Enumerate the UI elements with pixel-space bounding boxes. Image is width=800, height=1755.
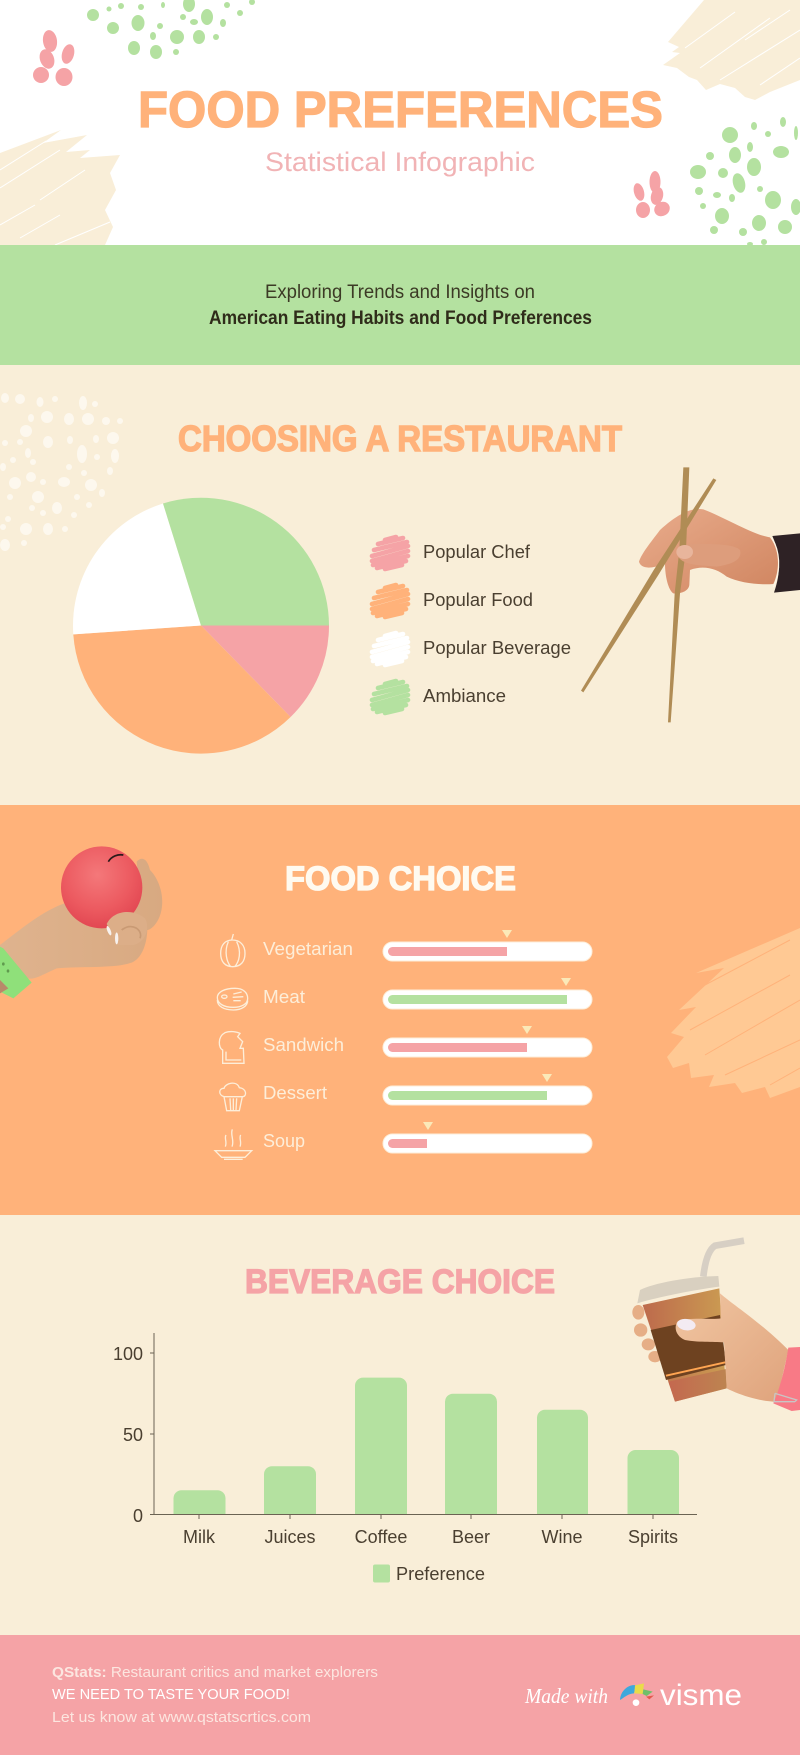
leaf cluster: top left pink — [33, 29, 76, 86]
legend: popular food: Popular Food — [423, 590, 533, 610]
brush stroke: top right — [663, 0, 800, 100]
legend: popular food — [372, 585, 533, 617]
made with visme: visme — [660, 1679, 742, 1712]
brush stroke: left — [0, 130, 120, 245]
icon: muffin — [220, 1083, 246, 1111]
x axis labels: Wine — [541, 1527, 583, 1547]
made with visme: Made with — [524, 1684, 608, 1708]
row: dessert — [263, 1074, 592, 1105]
dots: top green — [87, 0, 255, 59]
y axis labels — [113, 1344, 143, 1526]
footer line 2: WE NEED TO TASTE YOUR FOOD! — [52, 1687, 290, 1703]
y axis labels: 0 — [133, 1506, 143, 1526]
brush stroke: right — [667, 928, 800, 1098]
heading: FOOD CHOICE — [285, 860, 516, 898]
bars — [174, 1378, 679, 1514]
chart legend: Preference — [396, 1564, 485, 1584]
intro bold line: American Eating Habits and Food Preferences — [209, 308, 592, 329]
panel: beverage choice — [0, 1215, 800, 1635]
illustration: hand holding cup — [632, 1241, 800, 1411]
panel: footer — [0, 1635, 800, 1755]
row: sandwich — [263, 1026, 592, 1057]
icon: soup — [215, 1129, 252, 1159]
row: meat — [263, 978, 592, 1009]
x axis labels: Milk — [183, 1527, 216, 1547]
x axis labels: Beer — [452, 1527, 490, 1547]
x axis labels — [183, 1527, 678, 1547]
intro line: Exploring Trends and Insights on — [265, 282, 535, 303]
legend: ambiance: Ambiance — [423, 686, 506, 706]
icon: sandwich — [219, 1032, 244, 1063]
icon: meat — [217, 988, 248, 1010]
subtitle: Statistical Infographic — [265, 147, 535, 177]
row: soup — [263, 1122, 592, 1153]
panel: intro banner — [0, 245, 800, 365]
icon: pepper — [221, 934, 245, 967]
title: FOOD PREFERENCES — [138, 81, 663, 138]
icon: visme logo — [620, 1683, 654, 1706]
row: sandwich: Sandwich — [263, 1035, 344, 1055]
bar chart — [113, 1333, 697, 1584]
pie legend — [372, 537, 571, 713]
row: vegetarian: Vegetarian — [263, 939, 353, 959]
footer line 3: Let us know at www.qstatscrtics.com — [52, 1710, 311, 1726]
made with visme — [524, 1679, 742, 1712]
legend: popular chef — [372, 537, 531, 569]
x axis labels: Juices — [264, 1527, 316, 1547]
y axis labels: 50 — [123, 1425, 143, 1445]
row: vegetarian — [263, 930, 592, 961]
pie chart — [73, 498, 329, 754]
panel: header — [0, 0, 800, 246]
legend: ambiance — [372, 681, 506, 713]
heading: CHOOSING A RESTAURANT — [178, 418, 622, 459]
panel: food choice — [0, 805, 800, 1215]
panel: choosing a restaurant — [0, 365, 800, 805]
legend: popular beverage — [372, 633, 571, 665]
legend: popular chef: Popular Chef — [423, 542, 531, 562]
x axis labels: Coffee — [355, 1527, 407, 1547]
illustration: hand with chopsticks — [581, 467, 800, 722]
leaf cluster: right pink — [632, 171, 672, 219]
x axis labels: Spirits — [628, 1527, 678, 1547]
row: dessert: Dessert — [263, 1083, 327, 1103]
heading: BEVERAGE CHOICE — [245, 1263, 555, 1301]
row: meat: Meat — [263, 987, 305, 1007]
dots: white pattern — [0, 393, 123, 551]
row: soup: Soup — [263, 1131, 305, 1151]
footer line 1: QStats: Restaurant critics and market explorers — [52, 1665, 378, 1681]
dots: right green — [690, 117, 800, 246]
illustration: hand holding apple — [0, 846, 162, 998]
y axis labels: 100 — [113, 1344, 143, 1364]
legend: popular beverage: Popular Beverage — [423, 638, 571, 658]
